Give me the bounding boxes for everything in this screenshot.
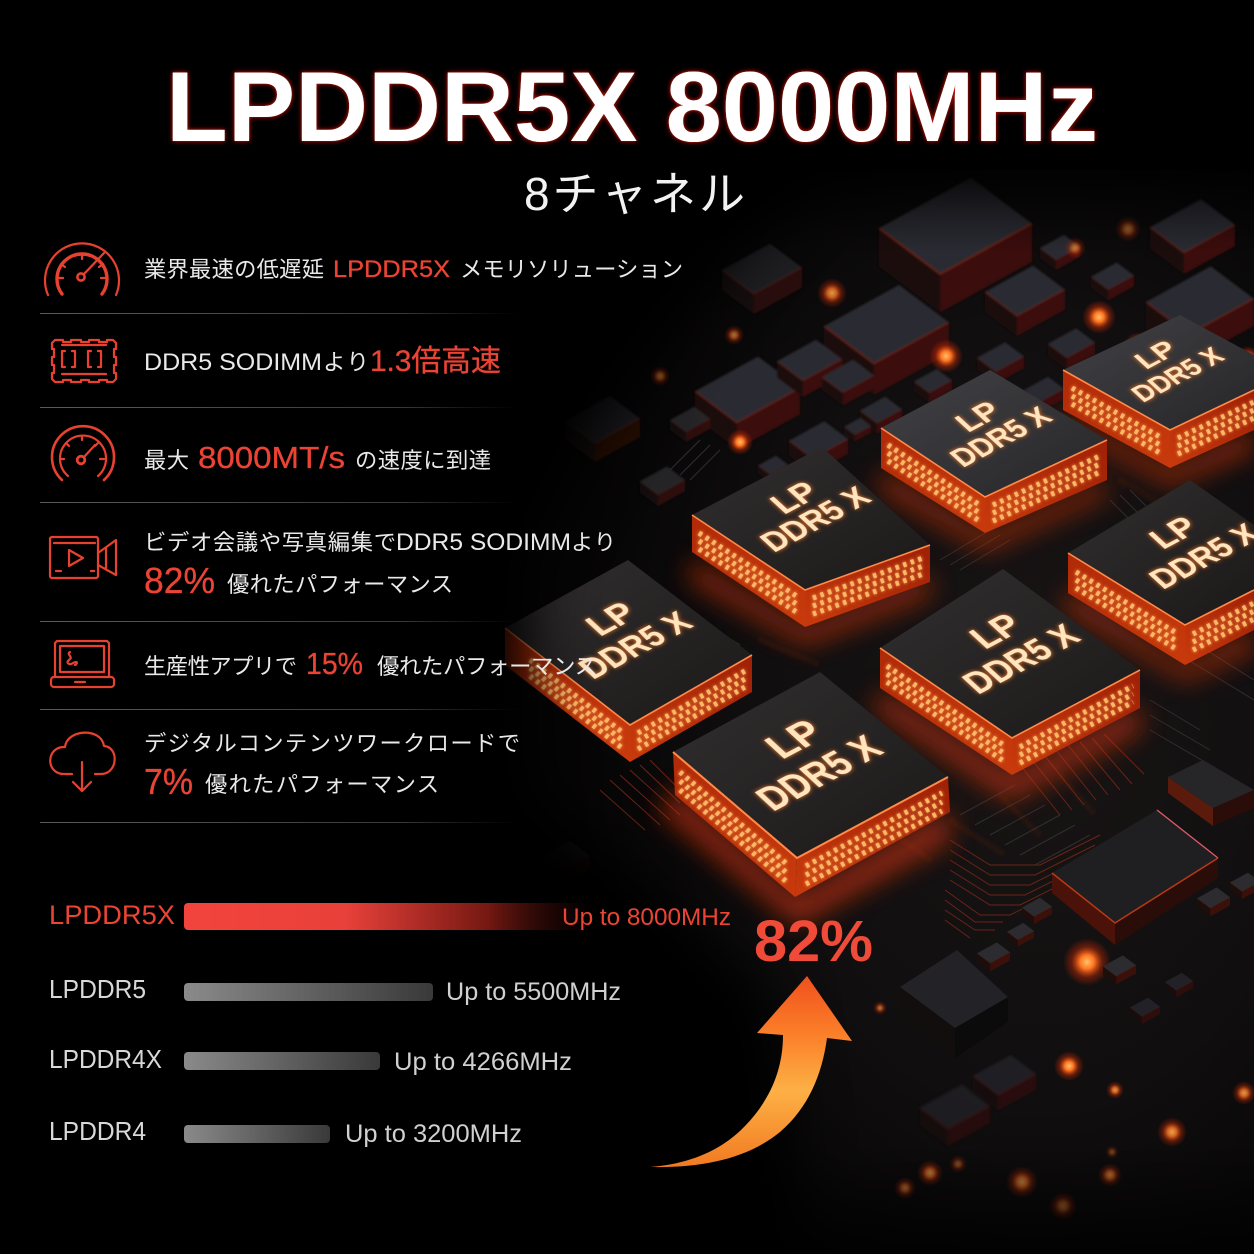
- feature: up to 8000MT/s: の速度に到達: [355, 448, 491, 473]
- lower board chips: [540, 760, 1254, 1146]
- circuit traces: [600, 440, 1254, 938]
- arrow: [650, 976, 852, 1167]
- feature: digital content workloads: 優れたパフォーマンス: [205, 772, 439, 797]
- feature: 1.3x faster: [144, 345, 501, 378]
- feature: productivity apps: [144, 646, 597, 681]
- chip: LPDDR5X front: [673, 672, 950, 897]
- feature: fastest low-latency: メモリソリューション: [460, 257, 683, 282]
- bar chart: memory speeds: [49, 900, 731, 1148]
- chip: LPDDR5X back centre: [881, 370, 1107, 533]
- chip: LPDDR5X upper middle: DDR5 X: [753, 480, 879, 558]
- bar: LPDDR4X: LPDDR4X: [49, 1044, 162, 1074]
- bar: LPDDR5X: [49, 900, 731, 931]
- feature: digital content workloads: デジタルコンテンツワークロードで: [144, 731, 520, 756]
- feature: up to 8000MT/s: 最大: [144, 448, 189, 473]
- chip: LPDDR5X back right: LP: [1128, 335, 1184, 374]
- callout: 82%: 82%: [754, 909, 873, 974]
- icon: speed gauge: [52, 426, 114, 480]
- feature: video and photo editing: 82%: [144, 560, 215, 601]
- bar: LPDDR5X: Up to 8000MHz: [562, 904, 731, 931]
- bar: LPDDR4: [49, 1116, 522, 1148]
- feature: digital content workloads: 7%: [144, 761, 193, 802]
- chip: LPDDR5X back centre: LP: [949, 397, 1008, 438]
- row dividers: [40, 313, 520, 823]
- chip: LPDDR5X left: LP: [578, 596, 645, 642]
- feature: up to 8000MT/s: 8000MT/s: [198, 440, 345, 475]
- chip: LPDDR5X upper middle: LP: [763, 476, 826, 520]
- small components, upper board: [565, 178, 1254, 506]
- feature: video and photo editing: より: [571, 530, 616, 555]
- icon: laptop: [51, 641, 114, 687]
- glow points: [650, 216, 1254, 1220]
- title: LPDDR5X 8000MHz: [166, 51, 1098, 162]
- chip: LPDDR5X middle right: LP: [1142, 511, 1205, 555]
- chip: LPDDR5X middle right: [1068, 480, 1254, 665]
- chip: LPDDR5X back centre: DDR5 X: [944, 402, 1059, 473]
- feature: video and photo editing: DDR5 SODIMM: [396, 529, 571, 556]
- chip: LPDDR5X front: LP: [756, 713, 833, 766]
- chip glow underlay: [660, 410, 1254, 925]
- chip: LPDDR5X back right: [1063, 315, 1254, 468]
- feature: video and photo editing: 優れたパフォーマンス: [227, 572, 453, 597]
- feature: fastest low-latency: 業界最速の低遅延: [144, 257, 324, 282]
- icon: speedometer: [45, 243, 119, 295]
- feature: 1.3x faster: DDR5 SODIMM: [144, 349, 322, 376]
- feature: video and photo editing: [144, 529, 616, 601]
- bar: LPDDR5: [49, 974, 621, 1006]
- feature: productivity apps: 生産性アプリで: [144, 654, 297, 679]
- chip: LPDDR5X centre right: [880, 569, 1140, 775]
- bar: LPDDR5: Up to 5500MHz: [446, 978, 621, 1006]
- bar: LPDDR4X: Up to 4266MHz: [394, 1048, 572, 1076]
- feature: up to 8000MT/s: [144, 440, 491, 475]
- subtitle: 8チャネル: [524, 168, 745, 220]
- bar: LPDDR5X: LPDDR5X: [49, 900, 175, 930]
- icon: memory module: [52, 340, 116, 382]
- feature: video and photo editing: ビデオ会議や写真編集で: [144, 530, 396, 555]
- bar: LPDDR4: LPDDR4: [49, 1116, 146, 1146]
- feature: fastest low-latency: [144, 256, 683, 283]
- icon: cloud download: [50, 733, 115, 791]
- feature: digital content workloads: [144, 731, 520, 802]
- chip: LPDDR5X centre right: LP: [961, 606, 1031, 655]
- circuit board backdrop: [480, 170, 1254, 1254]
- feature: productivity apps: 15%: [306, 646, 363, 681]
- chip: LPDDR5X left: DDR5 X: [571, 605, 701, 685]
- bar: LPDDR4X: [49, 1044, 572, 1076]
- feature: productivity apps: 優れたパフォーマンス: [377, 654, 597, 679]
- feature: 1.3x faster: 1.3倍高速: [370, 345, 501, 378]
- feature: 1.3x faster: より: [323, 350, 369, 375]
- icon: video camera: [50, 537, 116, 578]
- chip: LPDDR5X back right: DDR5 X: [1125, 342, 1231, 407]
- feature: fastest low-latency: LPDDR5X: [333, 256, 450, 283]
- bar: LPDDR5: LPDDR5: [49, 974, 146, 1004]
- chip: LPDDR5X front: DDR5 X: [747, 728, 892, 818]
- chip: LPDDR5X upper middle: [692, 447, 930, 627]
- bar: LPDDR4: Up to 3200MHz: [345, 1120, 522, 1148]
- chip: LPDDR5X centre right: DDR5 X: [954, 617, 1088, 700]
- chip: LPDDR5X left: [505, 560, 752, 762]
